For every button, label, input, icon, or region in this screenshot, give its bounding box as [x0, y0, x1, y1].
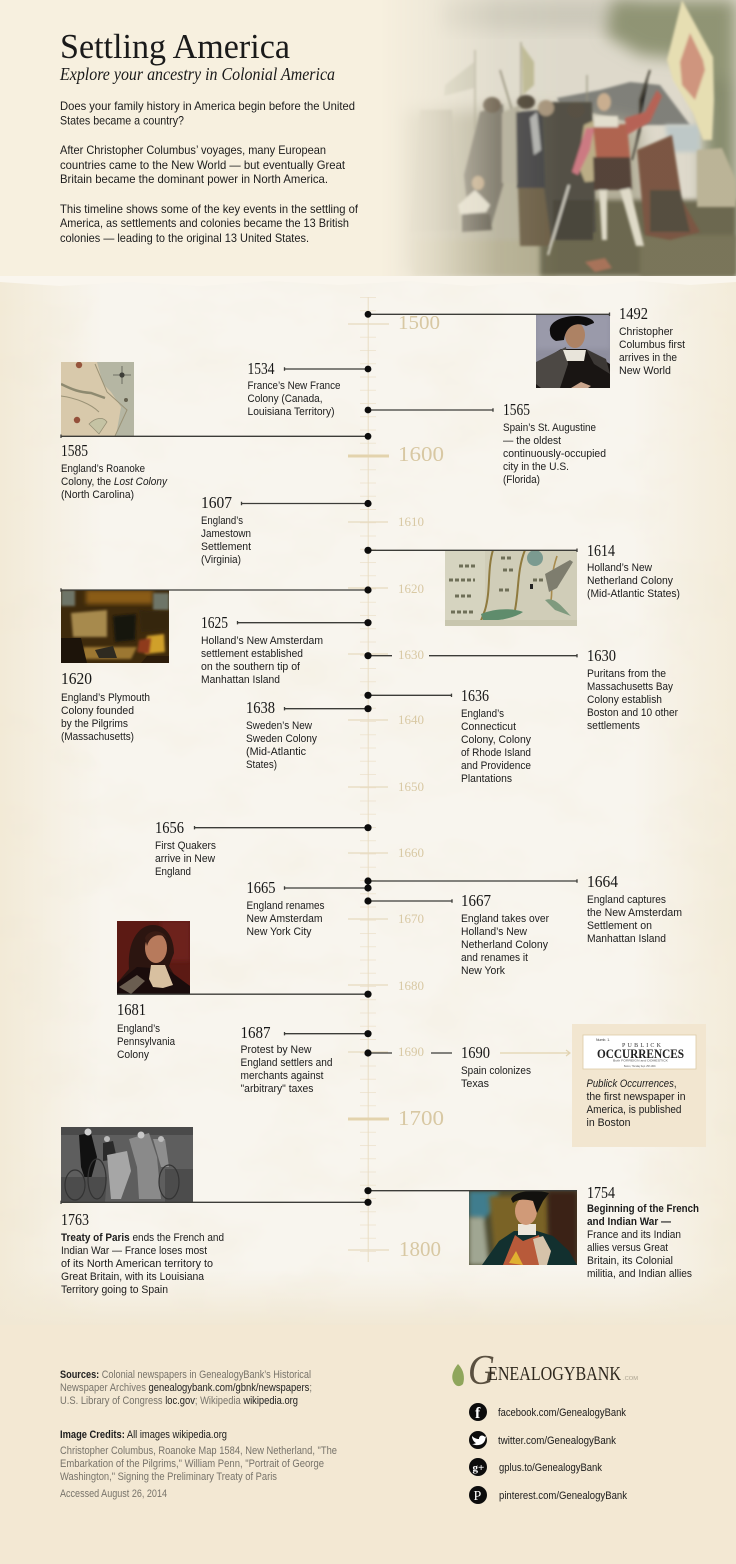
event 1636: England’s — [461, 708, 505, 720]
event 1763: of its North American territory to — [61, 1258, 213, 1270]
event 1636 — [368, 686, 532, 785]
event 1630 — [368, 646, 678, 732]
image credits text: Washington," Signing the Preliminary Treaty of Paris — [60, 1471, 278, 1483]
event 1620: 1620 — [61, 669, 92, 688]
logo: GenealogyBank: .COM — [623, 1376, 638, 1382]
event 1687: Protest by New — [240, 1044, 312, 1056]
event 1636: 1636 — [461, 686, 489, 705]
timeline axis with ticks and decade labels: 1660 — [398, 845, 424, 860]
sources text — [60, 1369, 312, 1407]
icon: leaf — [452, 1364, 464, 1386]
intro text — [60, 99, 359, 245]
logo: GenealogyBank: G — [468, 1348, 495, 1394]
sky and trees — [606, 0, 736, 240]
event 1492: 1492 — [619, 304, 648, 323]
event 1636: Plantations — [461, 773, 513, 785]
event 1754 — [368, 1183, 699, 1280]
event 1614: Netherland Colony — [587, 575, 674, 587]
social: google plus: g+ — [472, 1462, 484, 1474]
crowd — [436, 110, 452, 115]
event 1620: (Massachusetts) — [61, 731, 134, 743]
timeline axis with ticks and decade labels: 1650 — [398, 779, 424, 794]
callout: Publick Occurrences: Publick Occurrences, — [586, 1078, 676, 1090]
event 1492: Columbus first — [619, 339, 685, 351]
image credits text: Christopher Columbus, Roanoke Map 1584, New Netherland, "The — [60, 1445, 337, 1457]
event 1681: Pennsylvania — [117, 1036, 175, 1048]
event 1534: Colony (Canada, — [248, 393, 322, 405]
event 1687 — [240, 1023, 368, 1095]
event 1607: Settlement — [201, 541, 251, 553]
event 1625 — [201, 613, 368, 686]
image credits text — [60, 1429, 337, 1500]
event 1665 — [246, 878, 368, 938]
image credits text: Accessed August 26, 2014 — [60, 1488, 167, 1500]
subtitle: Explore your ancestry in Colonial America — [59, 64, 335, 84]
event 1565: Spain’s St. Augustine — [503, 422, 596, 434]
event 1585: Colony, the Lost Colony — [61, 476, 168, 488]
sources text: Sources: Colonial newspapers in GenealogyBank’s Historical — [60, 1369, 311, 1381]
image: newspaper masthead: OCCURRENCES — [597, 1046, 684, 1061]
timeline axis with ticks and decade labels: 1600 — [398, 442, 444, 466]
social: twitter: twitter.com/GenealogyBank — [498, 1435, 616, 1447]
social: facebook: f — [475, 1405, 481, 1422]
intro text: After Christopher Columbus’ voyages, many European — [60, 143, 326, 157]
image: Christopher Columbus portrait — [536, 315, 610, 388]
event 1754: and Indian War — — [587, 1216, 671, 1228]
event 1665: New Amsterdam — [246, 913, 323, 925]
event 1565: — the oldest — [503, 435, 561, 447]
social: pinterest: pinterest.com/GenealogyBank — [499, 1490, 627, 1502]
social: facebook: facebook.com/GenealogyBank — [498, 1407, 626, 1419]
timeline axis with ticks and decade labels: 1700 — [398, 1106, 444, 1130]
event 1630: 1630 — [587, 646, 616, 665]
event 1630: Colony establish — [587, 694, 662, 706]
event 1664: Manhattan Island — [587, 933, 666, 945]
social: pinterest: P — [474, 1489, 482, 1504]
logo: GenealogyBank: ENEALOGYBANK — [488, 1363, 621, 1385]
sources text: Newspaper Archives genealogybank.com/gbnk/newspapers; — [60, 1382, 312, 1394]
event 1607: (Virginia) — [201, 554, 241, 566]
event 1625: on the southern tip of — [201, 661, 301, 673]
timeline axis with ticks and decade labels: 1500 — [398, 312, 440, 334]
callout: Publick Occurrences: in Boston — [586, 1117, 630, 1129]
image: newspaper masthead: Boston, Thursday Sept. 25th 1690. — [624, 1064, 656, 1068]
event 1492: arrives in the — [619, 352, 677, 364]
image credits text: Embarkation of the Pilgrims," William Penn, "Portrait of George — [60, 1458, 324, 1470]
event 1763: Treaty of Paris ends the French and — [61, 1232, 224, 1244]
event 1638: 1638 — [246, 698, 275, 717]
event 1656: First Quakers — [155, 840, 217, 852]
event 1638 — [246, 698, 368, 771]
sources text: U.S. Library of Congress loc.gov; Wikipedia wikipedia.org — [60, 1395, 298, 1407]
event 1665: New York City — [246, 926, 312, 938]
event 1763: Great Britain, with its Louisiana — [61, 1271, 204, 1283]
event 1630: settlements — [587, 720, 641, 732]
logo: GenealogyBank — [452, 1348, 638, 1394]
event 1681: Colony — [117, 1049, 150, 1061]
event 1667: and renames it — [461, 952, 528, 964]
event 1638: Sweden Colony — [246, 733, 318, 745]
intro text: Does your family history in America begin before the United — [60, 99, 355, 113]
timeline axis with ticks and decade labels — [348, 297, 444, 1262]
event 1630: Boston and 10 other — [587, 707, 678, 719]
event 1585 — [61, 362, 368, 501]
event 1667: England takes over — [461, 913, 549, 925]
event 1667: New York — [461, 965, 506, 977]
event 1614: Holland’s New — [587, 562, 652, 574]
callout: Publick Occurrences: the first newspaper in — [586, 1091, 686, 1103]
connector — [368, 312, 610, 316]
event 1630: Massachusetts Bay — [587, 681, 674, 693]
event 1687: "arbitrary" taxes — [240, 1083, 314, 1095]
intro text: countries came to the New World — but eventually Great — [60, 158, 346, 172]
event 1534: 1534 — [248, 359, 274, 378]
event 1625: 1625 — [201, 613, 228, 632]
event 1754: 1754 — [587, 1183, 615, 1202]
event 1607: 1607 — [201, 493, 232, 512]
event 1565: continuously-occupied — [503, 448, 606, 460]
event 1681: 1681 — [117, 1000, 146, 1019]
intro text: America, as settlements and colonies became the 13 British — [60, 216, 349, 230]
event 1656 — [155, 818, 368, 878]
event 1638: (Mid-Atlantic — [246, 746, 307, 758]
event 1664: Settlement on — [587, 920, 652, 932]
image credits text: Image Credits: All images wikipedia.org — [60, 1429, 227, 1441]
event 1625: Holland’s New Amsterdam — [201, 635, 323, 647]
timeline axis with ticks and decade labels: 1630 — [398, 647, 424, 662]
event 1636: of Rhode Island — [461, 747, 531, 759]
event 1585: England’s Roanoke — [61, 463, 145, 475]
event 1754: Britain, its Colonial — [587, 1255, 673, 1267]
event 1690: Texas — [461, 1078, 490, 1090]
intro text: colonies — leading to the original 13 United States. — [60, 231, 309, 245]
panel: header — [0, 0, 736, 276]
image: Embarkation of the Pilgrims — [61, 590, 169, 663]
event 1687: England settlers and — [240, 1057, 332, 1069]
event 1754: France and its Indian — [587, 1229, 681, 1241]
event 1656: England — [155, 866, 191, 878]
event 1763: Territory going to Spain — [61, 1284, 168, 1296]
figures right — [637, 135, 700, 240]
event 1565 — [368, 400, 606, 486]
intro text: States became a country? — [60, 114, 184, 128]
flag — [667, 0, 714, 140]
event 1636: Colony, Colony — [461, 734, 532, 746]
image: New Netherland map — [445, 551, 577, 626]
event 1638: Sweden’s New — [246, 720, 312, 732]
event 1492: New World — [619, 365, 671, 377]
image: George Washington portrait — [469, 1191, 577, 1265]
event 1492 — [368, 304, 685, 388]
banners and spears — [522, 45, 534, 95]
Columbus — [579, 120, 596, 184]
event 1665: England renames — [246, 900, 325, 912]
timeline axis with ticks and decade labels: 1690 — [398, 1044, 424, 1059]
title: Settling America — [60, 27, 290, 66]
event 1763 — [61, 1127, 368, 1296]
image: newspaper masthead: Both FORREIGN and DOMESTICK — [613, 1058, 668, 1062]
event 1534: France’s New France — [248, 380, 340, 392]
timeline event dots — [364, 311, 372, 1206]
event 1534 — [248, 359, 368, 418]
event 1620: by the Pilgrims — [61, 718, 129, 730]
event 1664: England captures — [587, 894, 667, 906]
event 1690: 1690 — [461, 1043, 490, 1062]
timeline axis with ticks and decade labels: 1680 — [398, 978, 424, 993]
intro text: Britain became the dominant power in North America. — [60, 172, 328, 186]
event 1763: 1763 — [61, 1210, 89, 1229]
event 1664: the New Amsterdam — [587, 907, 682, 919]
image: newspaper masthead: PUBLICK — [622, 1043, 662, 1049]
event 1665: 1665 — [246, 878, 276, 897]
event 1614: 1614 — [587, 541, 615, 560]
event 1620: England’s Plymouth — [61, 692, 150, 704]
kneeling boy — [458, 190, 490, 214]
event 1656: arrive in New — [155, 853, 215, 865]
event 1763: Indian War — France loses most — [61, 1245, 207, 1257]
event 1614 — [368, 541, 680, 626]
panel: footer — [0, 1325, 736, 1564]
event 1585: 1585 — [61, 441, 88, 460]
timeline axis with ticks and decade labels: 1800 — [399, 1237, 441, 1261]
timeline axis with ticks and decade labels: 1670 — [398, 911, 424, 926]
timeline axis with ticks and decade labels: 1620 — [398, 581, 424, 596]
image: newspaper masthead — [583, 1035, 696, 1069]
event 1607 — [201, 493, 368, 566]
event 1636: and Providence — [461, 760, 531, 772]
callout: Publick Occurrences — [572, 1024, 706, 1147]
arrow to newspaper callout — [500, 1050, 570, 1056]
image: William Penn portrait — [117, 921, 190, 994]
event 1664 — [368, 872, 682, 945]
event 1667 — [368, 891, 549, 977]
timeline axis with ticks and decade labels: 1640 — [398, 712, 424, 727]
social: google plus: gplus.to/GenealogyBank — [499, 1462, 602, 1474]
event 1565: (Florida) — [503, 474, 540, 486]
social: google plus — [469, 1458, 602, 1476]
event 1681 — [117, 921, 368, 1061]
event 1565: 1565 — [503, 400, 530, 419]
social: pinterest — [469, 1486, 627, 1504]
event 1667: 1667 — [461, 891, 491, 910]
event 1607: Jamestown — [201, 528, 251, 540]
event 1656: 1656 — [155, 818, 184, 837]
event 1687: 1687 — [240, 1023, 270, 1042]
callout: Publick Occurrences: America, is published — [586, 1104, 682, 1116]
event 1620 — [61, 588, 368, 743]
event 1690 — [368, 1043, 532, 1090]
event 1667: Netherland Colony — [461, 939, 549, 951]
social: facebook — [469, 1403, 626, 1422]
event 1614: (Mid-Atlantic States) — [587, 588, 680, 600]
event 1664: 1664 — [587, 872, 618, 891]
event 1636: Connecticut — [461, 721, 516, 733]
image: newspaper masthead: Numb. 1. — [596, 1038, 610, 1042]
event 1607: England’s — [201, 515, 244, 527]
event 1754: allies versus Great — [587, 1242, 668, 1254]
social: twitter — [469, 1431, 616, 1449]
event 1534: Louisiana Territory) — [248, 406, 334, 418]
painting: landing of Columbus — [370, 0, 736, 276]
event 1681: England’s — [117, 1023, 161, 1035]
event 1620: Colony founded — [61, 705, 134, 717]
event 1585: (North Carolina) — [61, 489, 134, 501]
event 1690: Spain colonizes — [461, 1065, 532, 1077]
event 1565: city in the U.S. — [503, 461, 569, 473]
image: Signing the Treaty of Paris — [61, 1127, 193, 1202]
intro text: This timeline shows some of the key events in the settling of — [60, 202, 359, 216]
timeline axis with ticks and decade labels: 1610 — [398, 514, 424, 529]
event 1625: settlement established — [201, 648, 303, 660]
heads — [483, 97, 501, 113]
event 1667: Holland’s New — [461, 926, 527, 938]
event 1630: Puritans from the — [587, 668, 666, 680]
image: Roanoke map — [61, 362, 134, 436]
event 1492: Christopher — [619, 326, 673, 338]
event 1625: Manhattan Island — [201, 674, 280, 686]
event 1754: militia, and Indian allies — [587, 1268, 693, 1280]
event 1638: States) — [246, 759, 277, 771]
event 1687: merchants against — [240, 1070, 324, 1082]
event 1754: Beginning of the French — [587, 1203, 699, 1215]
